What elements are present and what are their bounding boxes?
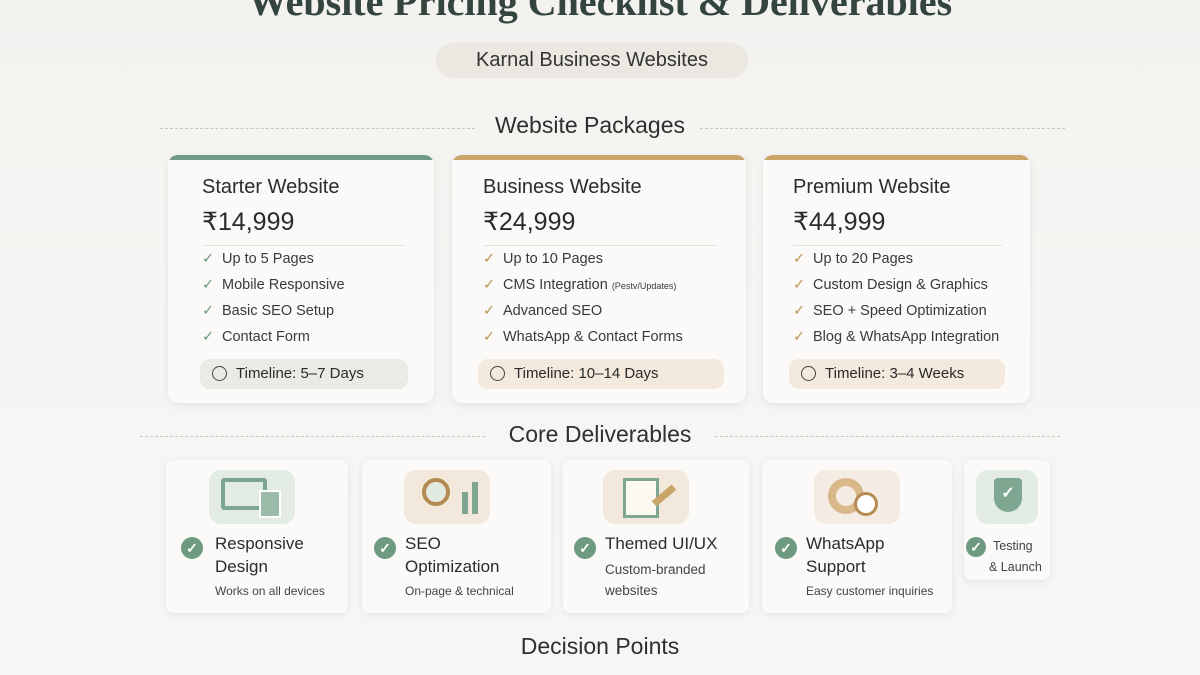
subtitle pill (436, 43, 748, 78)
deliverable: themed ui/ux (563, 460, 749, 613)
deliverable: testing & launch: & Launch (989, 560, 1042, 574)
panel: starter: ✓ (202, 277, 214, 293)
deliverable: seo: ✓ (379, 540, 391, 556)
deliverable: responsive design: Works on all devices (215, 584, 325, 598)
panel: starter: Timeline: 5–7 Days (236, 365, 364, 382)
panel: business: ✓ (483, 277, 495, 293)
panel: starter: ✓ (202, 329, 214, 345)
deliverable: themed ui/ux: websites (605, 583, 658, 598)
panel: business: Timeline: 10–14 Days (514, 365, 659, 382)
panel: starter (168, 155, 434, 403)
deliverable: responsive design: Design (215, 557, 268, 576)
icon: devices (209, 470, 295, 524)
panel: premium: ✓ (793, 303, 805, 319)
panel: starter: ✓ (202, 303, 214, 319)
heading: website packages: Website Packages (495, 112, 685, 138)
panel: premium: ✓ (793, 329, 805, 345)
panel: starter: Starter Website (202, 176, 339, 198)
subtitle pill: Karnal Business Websites (476, 49, 708, 71)
panel: business: Business Website (483, 176, 642, 198)
panel: starter: Contact Form (222, 329, 310, 345)
deliverable: testing & launch (964, 460, 1050, 580)
icon: lifebuoy (814, 470, 900, 524)
heading: decision points: Decision Points (521, 633, 679, 659)
panel: premium: Timeline: 3–4 Weeks (825, 365, 964, 382)
deliverable: whatsapp support: Easy customer inquiries (806, 584, 933, 598)
deliverable: whatsapp support: ✓ (780, 540, 792, 556)
icon: shield (976, 470, 1038, 524)
deliverable: responsive design (166, 460, 348, 613)
panel: starter: Basic SEO Setup (222, 303, 334, 319)
deliverable: responsive design: Responsive (215, 534, 304, 553)
panel: premium: Up to 20 Pages (813, 251, 913, 267)
deliverable: seo (362, 460, 551, 613)
deliverable: whatsapp support (762, 460, 952, 613)
panel: premium: ₹44,999 (793, 208, 885, 236)
panel: business: ✓ (483, 251, 495, 267)
deliverable: whatsapp support: Support (806, 557, 866, 576)
panel: business (452, 155, 746, 403)
panel: business: ₹24,999 (483, 208, 575, 236)
deliverable: seo: Optimization (405, 557, 499, 576)
deliverable: whatsapp support: WhatsApp (806, 534, 884, 553)
deliverable: themed ui/ux: ✓ (579, 540, 591, 556)
deliverable: responsive design: ✓ (186, 540, 198, 556)
panel: starter: ₹14,999 (202, 208, 294, 236)
panel: starter: ✓ (202, 251, 214, 267)
panel: starter: Up to 5 Pages (222, 251, 314, 267)
panel: business: Advanced SEO (503, 303, 602, 319)
icon: design document (603, 470, 689, 524)
deliverable: seo: On-page & technical (405, 584, 514, 598)
panel: premium: Custom Design & Graphics (813, 277, 988, 293)
panel: starter: Mobile Responsive (222, 277, 345, 293)
panel: business: ✓ (483, 303, 495, 319)
panel: business: CMS Integration (Pestv/Updates) (503, 277, 676, 293)
panel: business: Up to 10 Pages (503, 251, 603, 267)
icon: magnifier chart (404, 470, 490, 524)
panel: business: ✓ (483, 329, 495, 345)
panel: premium (763, 155, 1030, 403)
deliverable: testing & launch: Testing (993, 539, 1033, 553)
deliverable: seo: SEO (405, 534, 441, 553)
panel: premium: ✓ (793, 277, 805, 293)
deliverable: testing & launch: ✓ (970, 539, 982, 555)
panel: premium: SEO + Speed Optimization (813, 303, 987, 319)
panel: premium: Blog & WhatsApp Integration (813, 329, 999, 345)
icon: shield: ✓ (1001, 485, 1015, 502)
panel: business: WhatsApp & Contact Forms (503, 329, 683, 345)
heading: core deliverables: Core Deliverables (509, 421, 691, 447)
deliverable: themed ui/ux: Custom-branded (605, 562, 706, 577)
panel: premium: Premium Website (793, 176, 950, 198)
panel: premium: ✓ (793, 251, 805, 267)
deliverable: themed ui/ux: Themed UI/UX (605, 534, 717, 553)
